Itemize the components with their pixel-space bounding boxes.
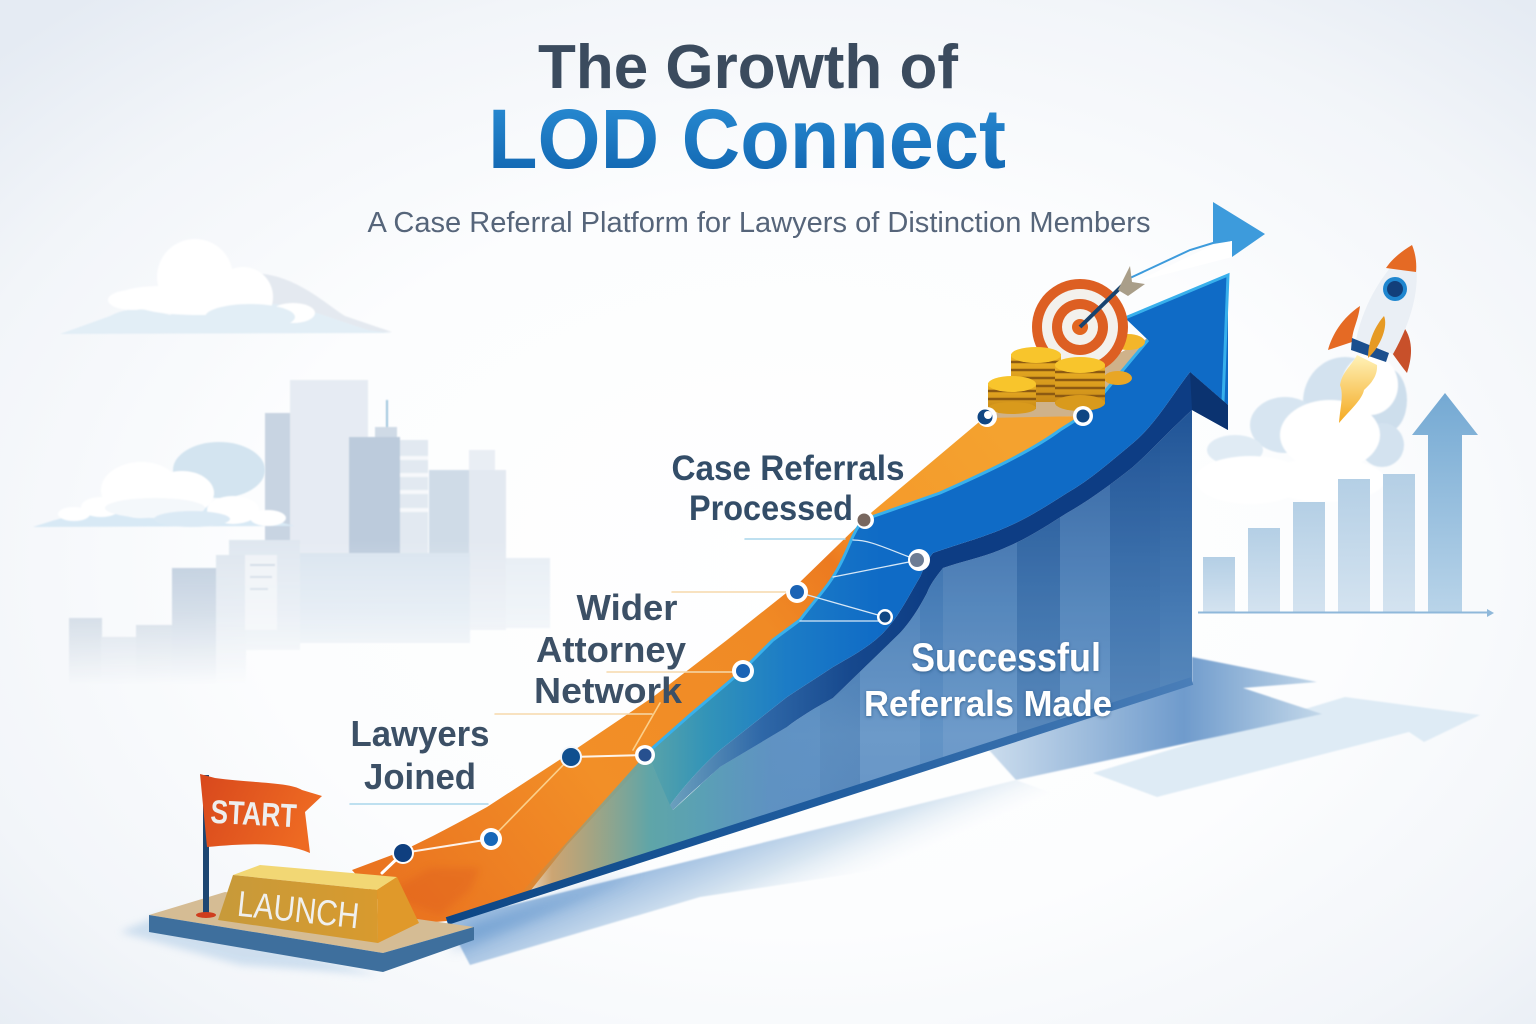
title: LOD Connect — [488, 92, 1006, 186]
background bar chart — [1198, 393, 1494, 617]
flame — [1339, 355, 1377, 423]
coins — [988, 347, 1105, 414]
rocket exhaust cloud — [1195, 355, 1407, 504]
dark underside ribbon — [670, 372, 1228, 810]
label: Lawyers Joined: Lawyers — [350, 713, 490, 754]
title — [488, 33, 1006, 186]
orange band — [352, 416, 1083, 925]
flag — [196, 774, 322, 918]
cloud: upper left — [60, 239, 392, 334]
label: Successful Referrals Made: Referrals Made — [864, 683, 1112, 724]
label: Successful Referrals Made — [864, 636, 1112, 724]
arrow through target, leading up — [1130, 202, 1265, 282]
launch block: LAUNCH — [235, 883, 361, 936]
label: Successful Referrals Made: Successful — [911, 636, 1101, 680]
milestone dots — [392, 406, 1093, 864]
platform under coins — [985, 338, 1148, 418]
orange shading — [385, 868, 480, 915]
side wall — [700, 410, 1192, 828]
title: The Growth of — [538, 33, 958, 102]
label: Lawyers Joined — [350, 713, 490, 797]
city skyline — [69, 380, 550, 688]
blue arrow body — [647, 275, 1228, 805]
label: Case Referrals Processed — [672, 449, 904, 528]
cloud: mid left — [33, 442, 295, 527]
blended lower section — [510, 680, 860, 905]
label: Wider Attorney Network: Wider — [576, 587, 678, 628]
engine ring — [1351, 338, 1389, 362]
left fin — [1328, 306, 1360, 350]
cyan edge — [647, 275, 1228, 753]
target — [1032, 266, 1145, 375]
launch platform — [149, 892, 474, 972]
window — [1383, 277, 1407, 301]
rocket — [1328, 245, 1417, 423]
flag: START — [210, 793, 298, 834]
label: Lawyers Joined: Joined — [364, 756, 476, 797]
label: Wider Attorney Network: Attorney — [536, 629, 686, 670]
label: Wider Attorney Network: Network — [534, 670, 683, 711]
label: Case Referrals Processed: Processed — [689, 489, 853, 528]
launch block — [218, 865, 419, 943]
connector lines — [350, 539, 919, 873]
centre stripe — [1368, 316, 1385, 358]
label: Case Referrals Processed: Case Referrals — [672, 449, 904, 488]
small coins behind target — [1104, 334, 1145, 385]
base line of curve — [447, 681, 1192, 921]
arrowhead chevron shade — [1190, 372, 1228, 430]
growth curve — [352, 275, 1228, 925]
subtitle: A Case Referral Platform for Lawyers of Distinction Members — [368, 207, 1150, 239]
label: Wider Attorney Network — [534, 587, 686, 711]
right fin — [1388, 326, 1411, 373]
body — [1356, 247, 1417, 354]
ground shadow — [120, 657, 1480, 975]
nose cone — [1386, 245, 1416, 272]
